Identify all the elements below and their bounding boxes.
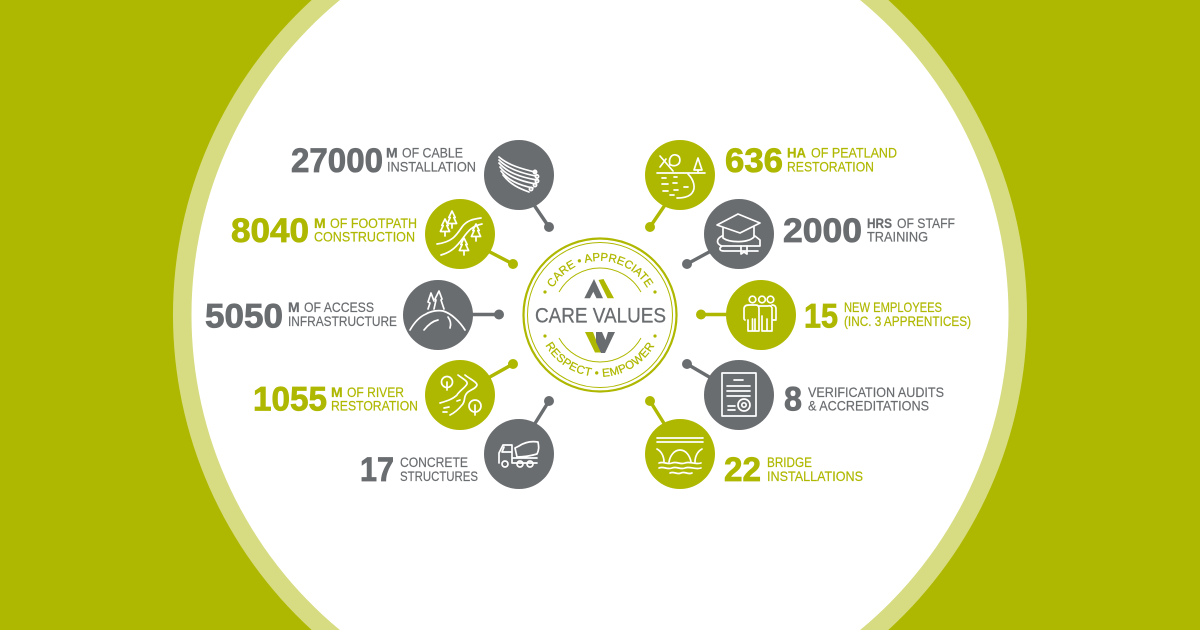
connector <box>488 364 513 378</box>
stat: cable installation: INSTALLATION <box>387 158 476 174</box>
figure: 15 <box>804 298 838 336</box>
badge title: CARE VALUES <box>535 304 666 328</box>
label: M <box>386 144 398 160</box>
figure: 5050 <box>205 298 283 336</box>
stat: staff training <box>682 199 955 269</box>
connector <box>472 313 499 316</box>
stat: river restoration: OF RIVER <box>347 384 404 400</box>
background ring <box>173 0 1027 630</box>
label: M <box>331 384 343 400</box>
label: BRIDGE <box>767 454 812 470</box>
stat: bridge installations <box>645 396 863 489</box>
stat: peatland restoration <box>645 140 897 232</box>
label: M <box>288 299 300 315</box>
stat: concrete structures: STRUCTURES <box>400 468 478 484</box>
icon: graduation cap and books <box>704 199 774 269</box>
figure: 8 <box>784 380 802 418</box>
stat: new employees: (INC. 3 APPRENTICES) <box>844 313 971 329</box>
stat: cable installation: OF CABLE <box>402 144 463 160</box>
label: HA <box>787 144 806 160</box>
icon: group of people <box>726 280 796 350</box>
icon: cable bundle <box>484 140 554 210</box>
icon: river <box>425 360 495 430</box>
stat: verification audits: & ACCREDITATIONS <box>808 398 929 414</box>
connector <box>534 205 549 227</box>
figure: 22 <box>724 451 761 489</box>
stat: footpath construction: CONSTRUCTION <box>314 228 415 244</box>
stat: staff training: OF STAFF <box>897 215 955 231</box>
connector <box>488 251 513 264</box>
figure: 17 <box>360 451 394 489</box>
figure: 8040 <box>231 212 309 250</box>
connector <box>701 313 727 316</box>
stat: verification audits <box>682 359 944 430</box>
connector <box>687 251 711 264</box>
figure: 1055 <box>253 380 327 418</box>
logo bottom <box>585 332 615 353</box>
icon: bridge <box>645 419 715 489</box>
stat: bridge installations: INSTALLATIONS <box>767 468 863 484</box>
badge bottom text: RESPECT • EMPOWER <box>546 342 654 377</box>
connector <box>650 401 665 425</box>
label: HRS <box>867 215 892 231</box>
icon: concrete mixer truck <box>484 419 554 489</box>
stat: staff training: TRAINING <box>867 228 928 244</box>
stat: new employees <box>696 280 971 350</box>
figure: 2000 <box>783 212 862 250</box>
label: NEW EMPLOYEES <box>844 299 942 315</box>
stat: cable installation <box>291 140 554 232</box>
stat: river restoration: RESTORATION <box>331 398 418 414</box>
figure: 27000 <box>291 142 383 180</box>
stat: access infrastructure <box>205 280 504 350</box>
connector <box>534 401 549 425</box>
connector <box>687 364 711 378</box>
stat: river restoration <box>253 359 518 430</box>
central badge: care values <box>522 237 678 393</box>
stat: footpath construction: OF FOOTPATH <box>330 215 417 231</box>
stat: peatland restoration: OF PEATLAND <box>811 144 897 160</box>
stat: access infrastructure: INFRASTRUCTURE <box>288 313 397 329</box>
stat: access infrastructure: OF ACCESS <box>304 299 374 315</box>
badge top text: CARE • APPRECIATE <box>548 252 654 288</box>
label: CONCRETE <box>400 454 468 470</box>
stat: concrete structures <box>360 396 554 489</box>
icon: hill with trees <box>403 280 473 350</box>
stat: peatland restoration: RESTORATION <box>787 158 874 174</box>
icon: peatland <box>645 140 715 210</box>
figure: 636 <box>725 142 783 180</box>
logo top <box>584 279 614 298</box>
connector <box>650 205 665 227</box>
label: VERIFICATION AUDITS <box>808 384 944 400</box>
white central circle <box>191 0 1009 630</box>
icon: footpath <box>425 199 495 269</box>
label: M <box>314 215 326 231</box>
stat: footpath construction <box>231 199 518 269</box>
icon: certificate <box>704 360 774 430</box>
